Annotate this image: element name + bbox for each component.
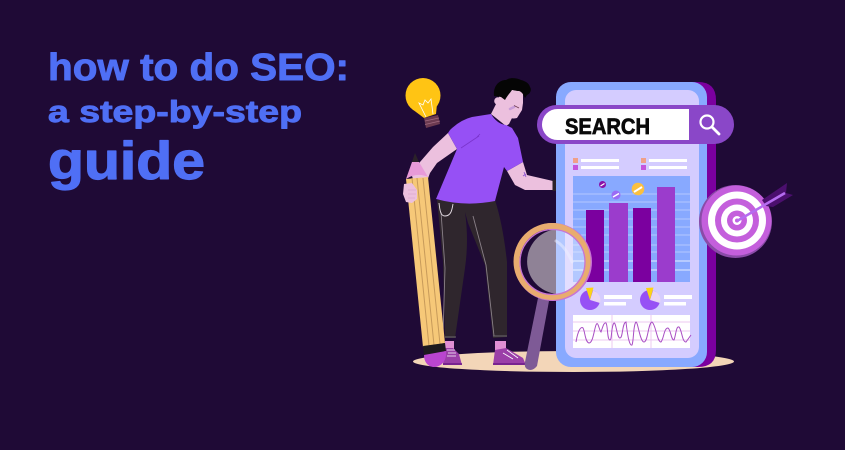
pie chart right	[640, 288, 692, 310]
chain	[439, 203, 453, 216]
icon: search magnifier	[700, 116, 719, 134]
handle	[525, 298, 549, 370]
person	[412, 78, 556, 365]
legs	[437, 200, 507, 338]
title: how to do SEO:	[48, 47, 349, 89]
hair	[494, 78, 531, 100]
phone	[556, 82, 716, 367]
line chart	[573, 315, 691, 348]
floor ellipse	[413, 351, 734, 372]
title: guide	[48, 132, 205, 191]
icon: target with arrow	[699, 183, 793, 258]
left arm	[412, 133, 457, 200]
search label: SEARCH	[565, 114, 650, 139]
title	[48, 47, 349, 191]
pie chart left	[580, 288, 632, 310]
lens rim	[515, 224, 591, 300]
shoes	[443, 341, 526, 365]
head	[499, 88, 523, 118]
magnifying glass	[515, 224, 591, 370]
shirt	[436, 114, 523, 204]
neck	[491, 100, 515, 126]
search bar	[537, 105, 734, 144]
hand on pencil	[403, 183, 417, 203]
right arm	[507, 162, 553, 190]
title: a step-by-step	[48, 94, 302, 129]
lens	[527, 229, 585, 294]
watch	[552, 180, 556, 191]
bar chart	[573, 176, 690, 282]
legend rows	[573, 158, 687, 170]
icon: lightbulb	[406, 78, 440, 128]
pencil	[403, 153, 446, 367]
